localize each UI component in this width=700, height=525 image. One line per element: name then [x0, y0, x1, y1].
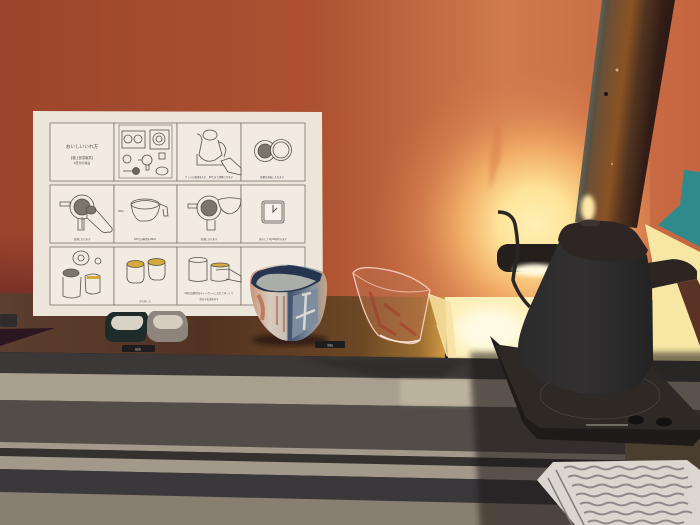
instruction poster — [33, 111, 323, 316]
icon: pouring leaves into teapot — [60, 195, 112, 241]
step grid — [50, 123, 305, 305]
icon: two filled cups: 入れました — [139, 299, 152, 303]
icon: clock — [259, 201, 288, 241]
small grey dish — [147, 311, 188, 342]
kettle base — [490, 336, 700, 446]
glass measuring pitcher — [353, 268, 456, 356]
folded napkin — [537, 460, 700, 525]
bowl name tag — [315, 341, 345, 348]
kettle body — [518, 240, 652, 394]
wall lamp — [497, 244, 567, 276]
bowl shadow — [252, 334, 328, 346]
icon: hand holding cup — [185, 258, 241, 301]
small dark dish — [105, 312, 148, 342]
dish name tag — [122, 345, 155, 352]
icon: teapot pouring into cups — [63, 251, 101, 298]
icon: two dishes: 茶葉を茶碗に入れます — [260, 175, 285, 179]
icon: measuring cup: 100℃の熱湯を180cc — [134, 237, 157, 241]
icon: clock: 蒸らして1分30秒待ちます — [259, 237, 288, 241]
icon: two filled cups — [127, 258, 165, 303]
poster title block: 2煎分の湯台 — [74, 160, 90, 165]
icon: pouring leaves into teapot: 急須に入れます — [74, 237, 91, 241]
orange wall background — [0, 0, 700, 305]
icon: tools overview — [119, 125, 172, 178]
teal paper bag — [658, 170, 700, 247]
striped table runner — [0, 352, 700, 525]
kettle lid knob — [580, 220, 600, 226]
gooseneck kettle on base — [490, 212, 700, 446]
kettle handle — [635, 259, 700, 346]
wooden post — [575, 0, 675, 228]
icon: pouring water into teapot — [188, 196, 241, 241]
wooden shelf — [0, 293, 450, 358]
kettle spout — [498, 212, 530, 307]
brightly lit counter — [445, 224, 700, 425]
poster title block — [66, 143, 98, 165]
icon: hand holding cup: 湯のみを温めます — [199, 297, 219, 301]
kettle lid — [558, 221, 648, 261]
icon: measuring cup — [118, 199, 168, 241]
icon: kettle on base — [185, 130, 241, 179]
bowl name tag: 茶碗 — [327, 342, 333, 348]
icon: kettle on base: ケトルの電源を入れ、80℃まで沸騰させます — [185, 175, 234, 179]
blue and white tea bowl — [250, 265, 327, 341]
poster title block: おいしいいれ方 — [66, 143, 98, 150]
icon: measuring cup: 180cc — [118, 210, 125, 213]
icon: hand holding cup: 2煎目は熱湯をティーポットに入れてゆっくり — [185, 291, 233, 295]
poster title block: 【極上煎茶碗茶】 — [69, 155, 95, 160]
icon: pouring water into teapot: 急須に入れます — [201, 237, 218, 241]
icon: two dishes — [254, 140, 292, 179]
dish name tag: 抹茶 — [135, 346, 141, 352]
